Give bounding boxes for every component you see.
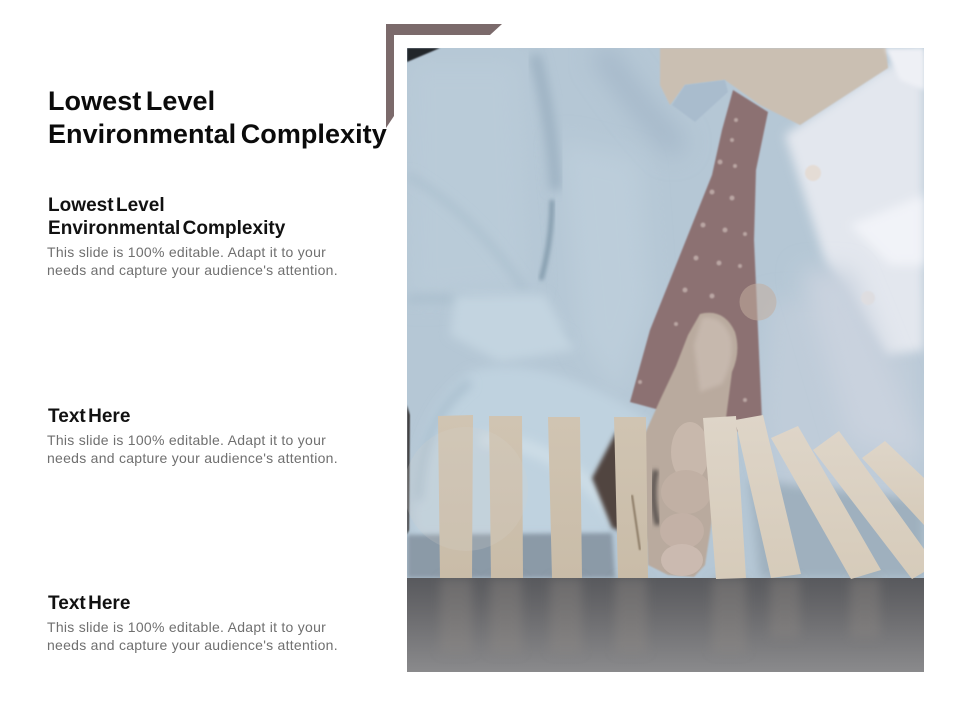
text block: lowest level environmental complexity [47, 195, 338, 278]
heading: lowest level environmental complexity: Lowest Level [48, 195, 165, 216]
photo: hand stopping falling dominoes [407, 48, 924, 672]
heading: lowest level environmental complexity: Environmental Complexity [48, 218, 285, 238]
heading: lowest level environmental complexity [48, 195, 286, 238]
table surface [407, 578, 924, 672]
body text three: needs and capture your audience's attention. [47, 637, 338, 653]
body text two: needs and capture your audience's attention. [47, 450, 338, 466]
body text one [47, 244, 338, 278]
title: Lowest Level [48, 86, 215, 116]
body text three: This slide is 100% editable. Adapt it to your [47, 619, 326, 635]
translucent bubble on tie [740, 284, 776, 320]
body text one: This slide is 100% editable. Adapt it to your [47, 244, 326, 260]
stopping hand [644, 313, 737, 577]
heading: text here three: Text Here [48, 593, 130, 614]
body text three [47, 619, 338, 653]
falling dominoes [703, 415, 924, 579]
raised hand at collar [660, 48, 924, 305]
text block: text here three [47, 593, 338, 653]
body text two [47, 432, 338, 466]
body text two: This slide is 100% editable. Adapt it to your [47, 432, 326, 448]
text block: text here two [47, 406, 338, 466]
shirt background [407, 48, 924, 578]
title [48, 86, 387, 149]
necktie [630, 90, 768, 432]
shirt buttons [805, 165, 821, 181]
heading: text here two: Text Here [48, 406, 130, 427]
corner bracket frame [386, 24, 502, 128]
dominoes [438, 415, 924, 579]
translucent bubble at left [407, 462, 490, 550]
body text one: needs and capture your audience's attention. [47, 262, 338, 278]
standing dominoes [438, 415, 648, 578]
title: Environmental Complexity [48, 119, 387, 149]
